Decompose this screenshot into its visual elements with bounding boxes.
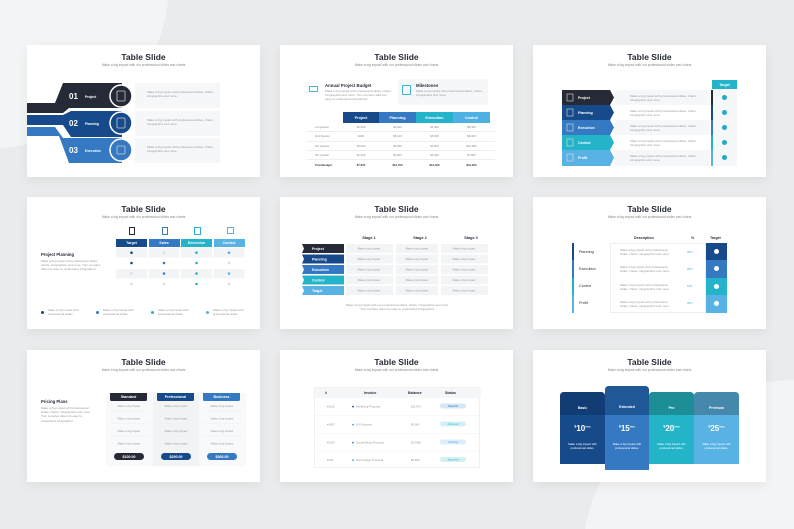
card extended: Make a big impact with professional slides.	[613, 442, 641, 450]
rows: Make a big impact with professional slides, charts, infographics and more.	[620, 265, 670, 273]
slide 1: ribbon table	[27, 45, 260, 177]
table: #1102	[327, 404, 335, 408]
title: Table Slide	[121, 357, 166, 367]
table: $1,500	[357, 125, 365, 129]
table: $3,600	[393, 153, 402, 157]
stage rows: Make a big impact	[358, 268, 381, 272]
subtitle: Make a big impact with our professional slides and charts	[355, 368, 438, 372]
plan columns: $300.00	[216, 454, 228, 458]
table: $5,400	[467, 125, 476, 129]
card: annual budget: Make a big impact with professional slides, charts, infographics and more. Turn complex data into easy to understand infographics.	[325, 89, 392, 101]
rows: Make a big impact with professional slides, charts, infographics and more.	[630, 109, 697, 117]
card: annual budget: Annual Project Budget	[325, 83, 371, 88]
stage headers: Stage 2	[413, 236, 427, 240]
stage headers	[362, 236, 478, 240]
left text: Make a big impact with professional slides, charts, infographics and more. Turn complex data into easy to understand infographics.	[41, 406, 91, 423]
header: Execution	[188, 241, 205, 245]
table: Balance	[408, 391, 422, 395]
card basic: Make a big impact with professional slides.	[568, 442, 597, 450]
card basic	[560, 392, 605, 464]
subtitle: Make a big impact with our professional slides and charts	[102, 63, 185, 67]
headers: Target	[710, 236, 721, 240]
ribbon graphic: Planning	[85, 122, 99, 126]
card premium	[694, 392, 739, 464]
ribbon graphic: 02	[69, 119, 78, 128]
slide 1: ribbon table: Make a big impact with professional slides, charts, infographics and more.	[147, 145, 214, 153]
table: $31,200	[466, 163, 477, 167]
table: $5,800	[411, 458, 420, 462]
table: $4,000	[357, 144, 365, 148]
table: $5,000	[393, 144, 402, 148]
table: #	[325, 391, 327, 395]
stage rows: Make a big impact	[358, 288, 381, 292]
card extended: $15/mo	[619, 424, 635, 433]
stage rows: Make a big impact	[406, 268, 429, 272]
rows: Make a big impact with professional slides, charts, infographics and more.	[630, 139, 697, 147]
table: Marketing Proposal	[356, 404, 380, 408]
target header	[712, 80, 737, 89]
headers: Description	[634, 236, 654, 240]
left text: Project Planning	[41, 252, 74, 257]
subtitle: Make a big impact with our professional slides and charts	[102, 368, 185, 372]
plan columns: $200.00	[170, 454, 182, 458]
subtitle: Make a big impact with our professional slides and charts	[355, 215, 438, 219]
card pro: $20/mo	[663, 424, 680, 433]
table: Web Design Proposal	[356, 458, 383, 462]
table: Execution	[425, 116, 444, 120]
grid	[116, 248, 244, 286]
legend	[41, 308, 244, 316]
plan columns: Make a big impact	[165, 442, 188, 446]
rows	[572, 243, 727, 313]
stage rows: Make a big impact	[406, 257, 429, 261]
table: $1,000	[430, 144, 439, 148]
plan columns: Make a big impact	[211, 442, 234, 446]
card: milestones: Milestones	[416, 83, 438, 88]
legend: Make a big impact with professional slides.	[48, 308, 79, 316]
plan columns	[110, 393, 242, 466]
table: Control	[465, 116, 478, 120]
rows: 25%	[687, 267, 693, 271]
table: #1025	[327, 440, 335, 444]
stage headers: Stage 3	[464, 236, 478, 240]
left text	[41, 252, 100, 271]
table: $13,800	[411, 440, 422, 444]
title: Table Slide	[374, 357, 419, 367]
stage rows: Make a big impact	[453, 246, 476, 250]
rows: 15%	[687, 284, 693, 288]
plan columns: Make a big impact	[118, 404, 141, 408]
stage rows: Make a big impact	[453, 288, 476, 292]
left text: Pricing Plans	[41, 399, 68, 404]
ribbon graphic: 03	[69, 146, 78, 155]
title: Table Slide	[627, 52, 672, 62]
stage rows: Target	[312, 289, 323, 293]
card premium: Premium	[709, 406, 724, 410]
title: Table Slide	[627, 357, 672, 367]
table: Approved	[447, 458, 459, 462]
rows: Profit	[578, 156, 588, 160]
table: $6,000	[467, 134, 476, 138]
rows: Planning	[579, 250, 594, 254]
slide 8: invoice table	[280, 350, 513, 482]
table: $6,900	[411, 422, 420, 426]
card: milestones	[398, 79, 488, 105]
slide 6: description % target	[533, 197, 766, 329]
table: $13,400	[429, 163, 440, 167]
card pro: Make a big impact with professional slides.	[657, 442, 686, 450]
ribbon graphic: Execution	[85, 149, 101, 153]
ribbon graphic: 01	[69, 92, 78, 101]
table: $3,000	[393, 125, 402, 129]
rows: Planning	[578, 111, 593, 115]
headers: %	[691, 236, 694, 240]
plan columns: Make a big impact	[165, 429, 188, 433]
legend: Make a big impact with professional slides.	[103, 308, 134, 316]
stage rows: Make a big impact	[358, 257, 381, 261]
plan columns: Make a big impact	[211, 429, 234, 433]
title: Table Slide	[374, 204, 419, 214]
table: 3rd Quarter	[315, 144, 329, 148]
stage rows: Make a big impact	[406, 288, 429, 292]
ribbon graphic	[27, 83, 132, 163]
table: #700	[327, 458, 334, 462]
target header: Target	[719, 82, 730, 86]
rows: 25%	[687, 250, 693, 254]
footer text: Make a big impact with our professional slides, charts, infographics and more. Turn complex data into easy to understand infographics.	[346, 303, 449, 311]
rows: Execution	[578, 126, 595, 130]
table	[307, 112, 495, 167]
header: Target	[126, 241, 137, 245]
table: Project	[355, 116, 367, 120]
rows: Profit	[579, 301, 588, 305]
table: $2,400	[430, 125, 439, 129]
subtitle: Make a big impact with our professional slides and charts	[355, 63, 438, 67]
slide 1: ribbon table: Make a big impact with professional slides, charts, infographics and more.	[147, 118, 214, 126]
stage rows	[302, 244, 488, 295]
plan columns: Make a big impact	[165, 404, 188, 408]
title: Table Slide	[627, 204, 672, 214]
slide 5: stages table	[280, 197, 513, 329]
plan columns: Make a big impact	[211, 416, 234, 420]
row texts	[135, 83, 220, 108]
slide 7: pricing plans	[27, 350, 260, 482]
table: 2nd Quarter	[315, 134, 330, 138]
table	[314, 387, 480, 468]
ribbon graphic: Project	[85, 95, 97, 99]
rows: Project	[578, 96, 591, 100]
icons	[129, 227, 234, 235]
table: #1087	[327, 422, 335, 426]
subtitle: Make a big impact with our professional slides and charts	[102, 215, 185, 219]
stage rows: Make a big impact	[453, 278, 476, 282]
stage rows: Make a big impact	[358, 278, 381, 282]
card basic: $10/mo	[574, 424, 591, 433]
table: Invoice	[364, 391, 376, 395]
card: milestones: Make a big impact with professional slides, charts, infographics and more.	[416, 89, 483, 97]
plan columns: Make a big impact	[118, 429, 141, 433]
stage rows: Planning	[312, 258, 327, 262]
rows	[562, 90, 737, 166]
stage rows: Project	[312, 247, 325, 251]
table: $5,100	[393, 134, 402, 138]
table: $1,200	[357, 153, 365, 157]
table: 1st Quarter	[315, 125, 329, 129]
card extended: Extended	[619, 405, 635, 409]
plan columns: Professional	[165, 395, 186, 399]
table: UX Proposal	[356, 422, 372, 426]
rows: Make a big impact with professional slides, charts, infographics and more.	[620, 300, 670, 308]
rows: Make a big impact with professional slides, charts, infographics and more.	[630, 94, 697, 102]
table: Approved	[447, 422, 459, 426]
table: Pending	[448, 440, 458, 444]
table: Total Budget	[315, 163, 332, 167]
table: $11,870	[411, 404, 421, 408]
rows: Control	[579, 284, 591, 288]
card premium: $25/mo	[708, 424, 725, 433]
stage rows: Make a big impact	[453, 268, 476, 272]
rows: Execution	[579, 267, 596, 271]
card extended	[605, 386, 649, 470]
table: $7,800	[467, 153, 476, 157]
table: $5,600	[430, 134, 439, 138]
rows: Control	[578, 141, 590, 145]
legend: Make a big impact with professional slides.	[213, 308, 244, 316]
left text: Make a big impact with professional slides, charts, infographics and more. Turn complex data into easy to understand infographics.	[41, 259, 100, 271]
plan columns: Make a big impact	[118, 442, 141, 446]
slide 3: arrow rows with target	[533, 45, 766, 177]
rows: Make a big impact with professional slides, charts, infographics and more.	[620, 283, 670, 291]
table: $400	[358, 134, 364, 138]
plan columns: $100.00	[122, 454, 136, 458]
table: $12,000	[466, 144, 477, 148]
stage rows: Make a big impact	[453, 257, 476, 261]
table: $13,700	[392, 163, 403, 167]
header: Sales	[159, 241, 169, 245]
table: 4th Quarter	[315, 153, 329, 157]
header	[116, 239, 245, 247]
stage rows: Execution	[312, 268, 329, 272]
card pro: Pro	[669, 406, 674, 410]
plan columns: Standard	[121, 395, 136, 399]
subtitle: Make a big impact with our professional slides and charts	[608, 63, 691, 67]
stage rows: Make a big impact	[406, 246, 429, 250]
plan columns: Make a big impact	[118, 416, 141, 420]
card pro	[649, 392, 694, 464]
card basic: Basic	[578, 406, 587, 410]
table: Status	[445, 391, 456, 395]
rows: 35%	[687, 301, 693, 305]
header: Control	[223, 241, 235, 245]
table: $4,400	[430, 153, 439, 157]
row texts: Make a big impact with professional slides, charts, infographics and more.	[147, 90, 214, 98]
title: Table Slide	[374, 52, 419, 62]
stage rows: Control	[312, 278, 324, 282]
headers	[634, 236, 721, 240]
stage rows: Make a big impact	[358, 246, 381, 250]
slide 4: project planning dot table	[27, 197, 260, 329]
table: Social Media Proposal	[356, 440, 384, 444]
plan columns: Business	[214, 395, 229, 399]
table: Planning	[389, 116, 406, 120]
table: $7,600	[357, 163, 365, 167]
slide 2: budget table	[280, 45, 513, 177]
title: Table Slide	[121, 204, 166, 214]
stage rows: Make a big impact	[406, 278, 429, 282]
legend: Make a big impact with professional slides.	[158, 308, 189, 316]
card: annual budget	[309, 83, 392, 101]
card premium: Make a big impact with professional slides.	[702, 442, 731, 450]
plan columns: Make a big impact	[211, 404, 234, 408]
slide 9: pricing cards	[533, 350, 766, 482]
title: Table Slide	[121, 52, 166, 62]
rows: Make a big impact with professional slides, charts, infographics and more.	[620, 248, 670, 256]
subtitle: Make a big impact with our professional slides and charts	[608, 215, 691, 219]
rows: Make a big impact with professional slides, charts, infographics and more.	[630, 154, 697, 162]
subtitle: Make a big impact with our professional slides and charts	[608, 368, 691, 372]
table: Rejected	[448, 404, 459, 408]
stage headers: Stage 1	[362, 236, 376, 240]
plan columns: Make a big impact	[165, 416, 188, 420]
rows: Make a big impact with professional slides, charts, infographics and more.	[630, 124, 697, 132]
